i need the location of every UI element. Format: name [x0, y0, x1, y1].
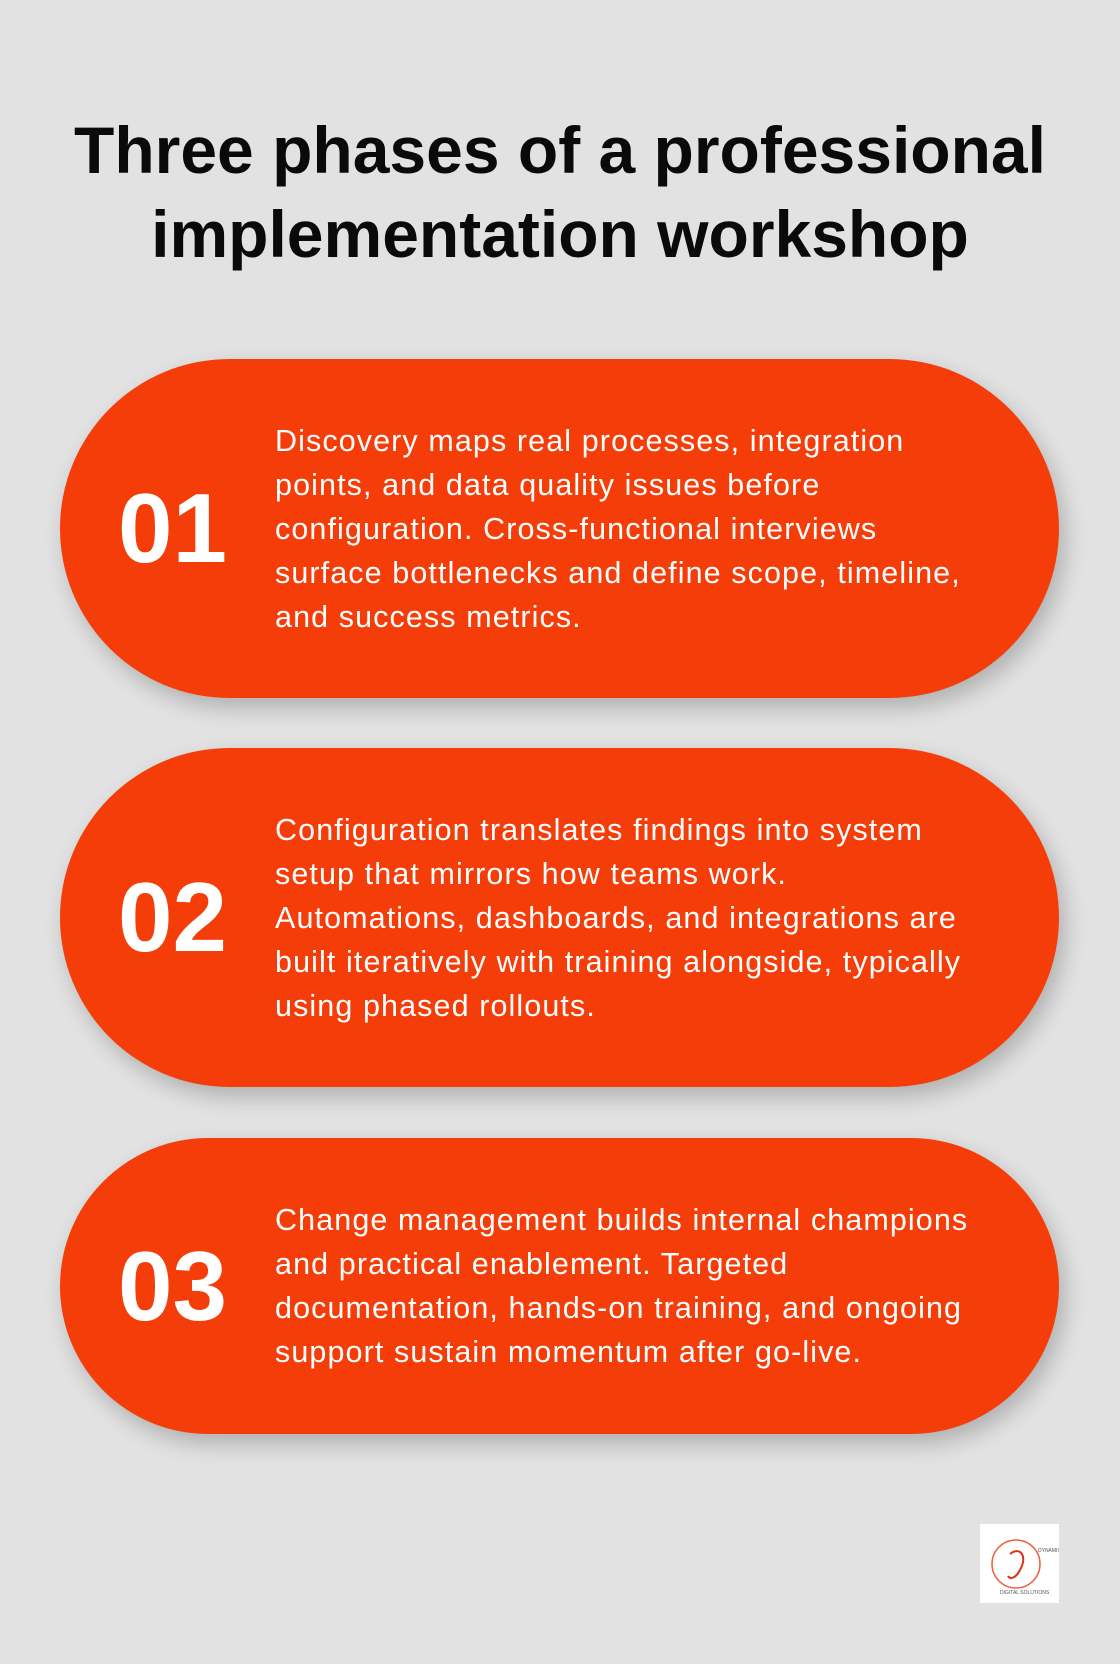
text: phase 03: documentation, hands-on training, and ongoing — [275, 1291, 962, 1325]
text: phase 01: configuration. Cross-functional interviews — [275, 512, 877, 546]
text: phase 02 — [275, 812, 961, 1022]
panel: phase 01 — [60, 359, 1059, 698]
icon: logo — [980, 1524, 1059, 1603]
text: phase 02: Automations, dashboards, and integrations are — [275, 900, 957, 934]
text: phase 01 — [275, 424, 961, 634]
number 03: 03 — [118, 1230, 227, 1340]
title: Three phases of a professional — [74, 113, 1046, 187]
panel: phase 03 — [60, 1138, 1059, 1434]
text: phase 03 — [275, 1203, 968, 1369]
text: phase 02: built iteratively with training alongside, typically — [275, 944, 961, 978]
text: phase 01: Discovery maps real processes, integration — [275, 424, 904, 458]
title — [74, 113, 1046, 271]
text: phase 03: support sustain momentum after go-live. — [275, 1335, 862, 1369]
text: phase 01: surface bottlenecks and define scope, timeline, — [275, 556, 961, 590]
text: phase 02: setup that mirrors how teams work. — [275, 856, 787, 890]
panel: phase 02 — [60, 748, 1059, 1087]
number 02: 02 — [118, 862, 227, 972]
text: phase 01: points, and data quality issues before — [275, 468, 820, 502]
number 01: 01 — [118, 473, 227, 583]
text: phase 02: using phased rollouts. — [275, 988, 596, 1022]
icon: logo: DIGITAL SOLUTIONS — [1000, 1590, 1050, 1596]
text: phase 03: and practical enablement. Targeted — [275, 1247, 788, 1281]
text: phase 03: Change management builds internal champions — [275, 1203, 968, 1237]
title: implementation workshop — [151, 197, 969, 271]
text: phase 02: Configuration translates findings into system — [275, 812, 923, 846]
text: phase 01: and success metrics. — [275, 600, 582, 634]
